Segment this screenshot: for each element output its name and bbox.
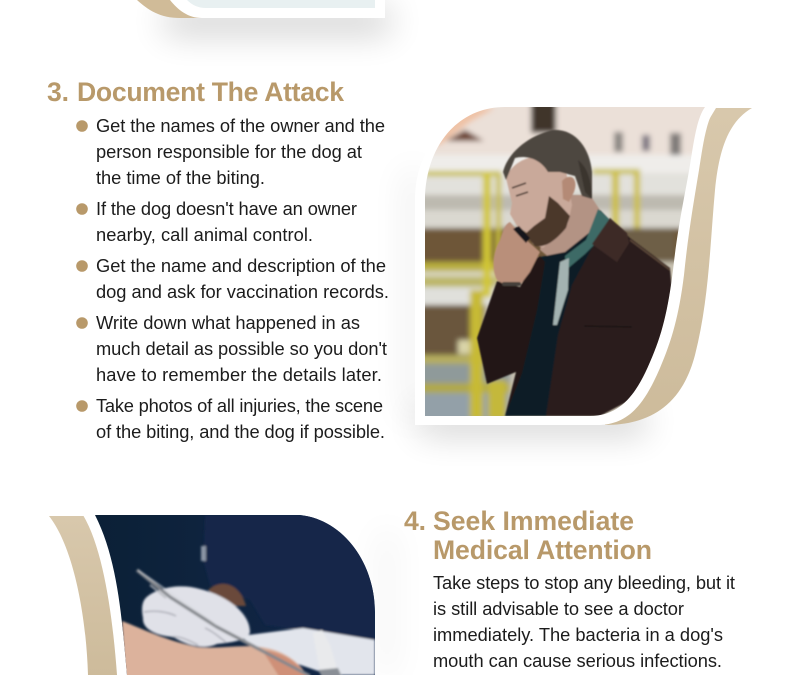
bullet 2: nearby, call animal control. (96, 224, 313, 245)
bullet 2 (76, 198, 357, 245)
beard (525, 196, 570, 246)
bullet 4 (76, 312, 387, 385)
phone (513, 226, 530, 243)
bullet 2: If the dog doesn't have an owner (96, 198, 357, 219)
ear (562, 177, 575, 202)
forceps (137, 570, 310, 675)
bullet 3 (76, 255, 389, 302)
photo card: top cropped (137, 0, 390, 34)
bullet 1: person responsible for the dog at (96, 141, 362, 162)
bullet 1: the time of the biting. (96, 167, 265, 188)
bullet 5: of the biting, and the dog if possible. (96, 421, 385, 442)
photo background (425, 107, 705, 416)
jacket collar (592, 218, 629, 262)
bullet 5: Take photos of all injuries, the scene (96, 395, 383, 416)
bullet 4: Write down what happened in as (96, 312, 360, 333)
neck (540, 194, 600, 257)
step 4 body text (433, 572, 735, 671)
photo card: man on phone (406, 95, 752, 434)
face (506, 156, 572, 248)
man (477, 130, 672, 416)
step 4 body text: immediately. The bacteria in a dog's (433, 624, 723, 645)
jacket sleeve (477, 256, 545, 416)
shirt (505, 210, 612, 416)
jacket right panel (546, 218, 672, 416)
step 4 heading: Seek Immediate (433, 506, 634, 536)
bullet 1 (76, 115, 385, 188)
step 4 body text: Take steps to stop any bleeding, but it (433, 572, 735, 593)
step 3 heading: Document The Attack (77, 77, 344, 107)
table (240, 628, 375, 675)
arm and hand (122, 621, 308, 675)
hand (493, 222, 540, 285)
photo card: medical treatment (49, 510, 392, 675)
glove (142, 586, 250, 647)
bullet 3: dog and ask for vaccination records. (96, 281, 389, 302)
bullet 4: have to remember the details later. (96, 364, 382, 385)
step 3 bullet list (76, 115, 389, 442)
bullet 4: much detail as possible so you don't (96, 338, 387, 359)
sleeve (203, 515, 375, 640)
hair (503, 130, 592, 199)
eye (512, 183, 528, 196)
bullet 1: Get the names of the owner and the (96, 115, 385, 136)
step 4 heading (404, 506, 652, 565)
step 4 body text: mouth can cause serious infections. (433, 650, 722, 671)
step 3 heading: 3. (47, 77, 69, 107)
white tube (319, 628, 324, 634)
step 4 body text: is still advisable to see a doctor (433, 598, 684, 619)
step 4 heading: Medical Attention (433, 535, 652, 565)
step 4 heading: 4. (404, 506, 426, 536)
bullet 5 (76, 395, 385, 442)
bullet 3: Get the name and description of the (96, 255, 386, 276)
